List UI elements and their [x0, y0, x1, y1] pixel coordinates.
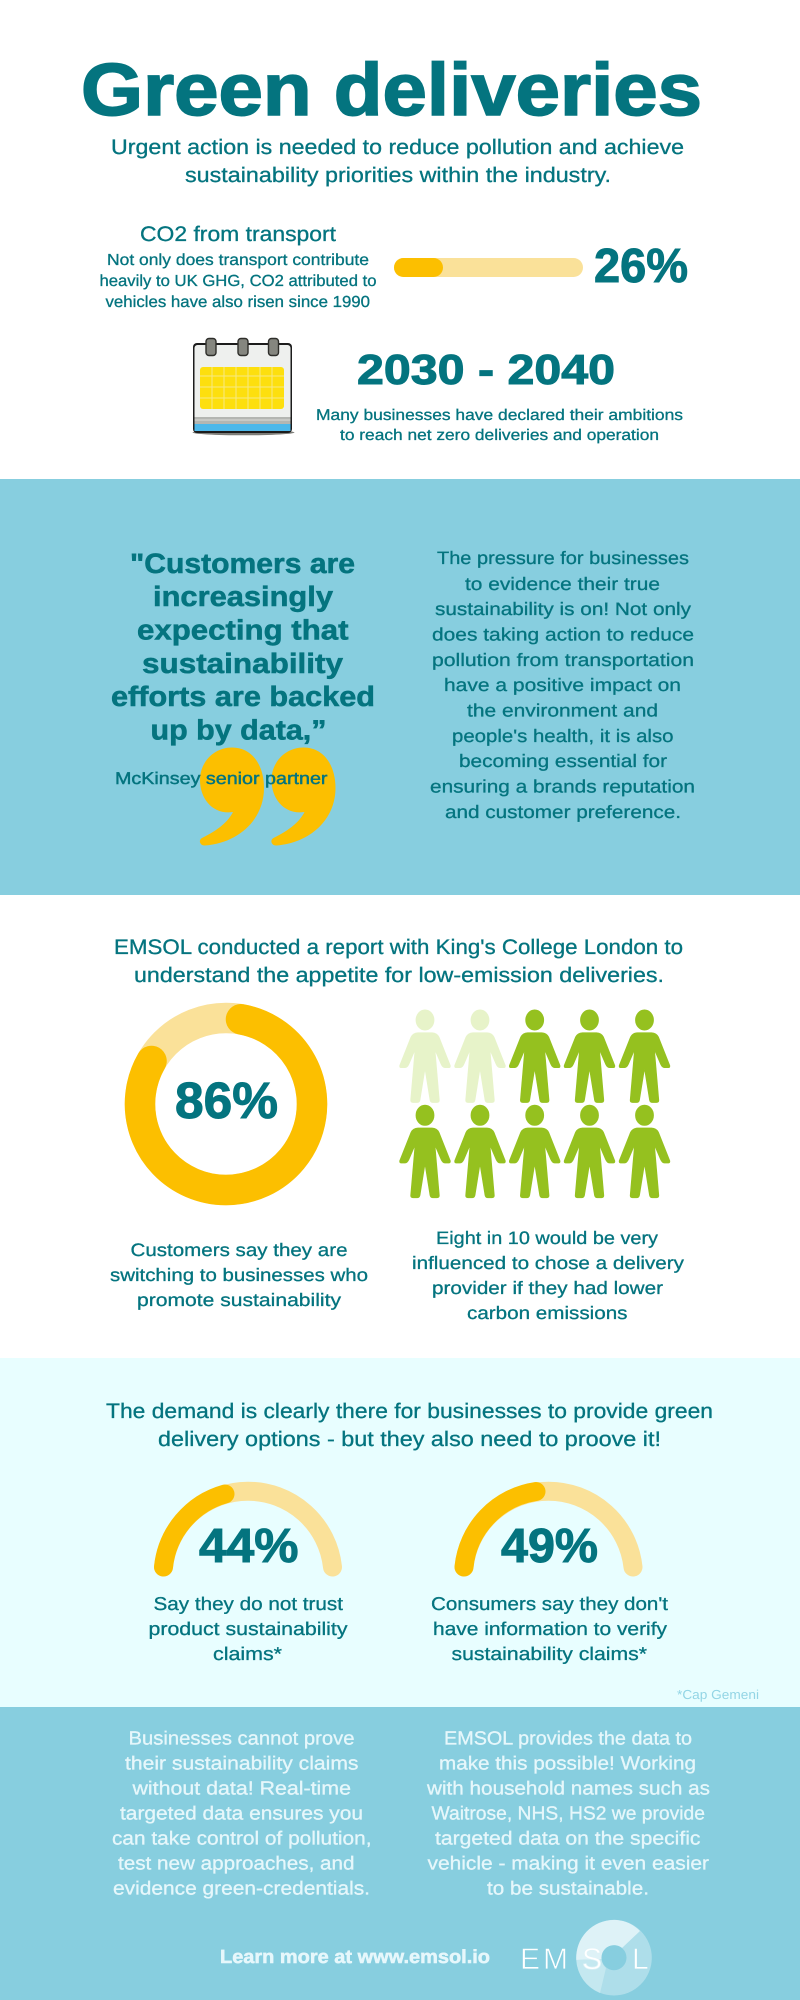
progress bar: 26%: [394, 258, 583, 277]
report heading: [114, 936, 683, 987]
pressure paragraph: the environment and: [467, 700, 658, 720]
subtitle: [111, 136, 684, 187]
gauge chart: 44%: [164, 1491, 332, 1567]
stat: 44%: 44%: [199, 1520, 298, 1573]
pull quote: efforts are backed: [111, 681, 375, 712]
stat: 2030 - 2040: 2030 - 2040: [357, 346, 615, 393]
donut chart: 86%: [140, 1018, 312, 1190]
gauge chart: 49%: [464, 1491, 633, 1567]
pull quote: expecting that: [137, 614, 348, 646]
pressure paragraph: sustainability is on! Not only: [435, 599, 691, 619]
pull quote: "Customers are: [130, 548, 355, 579]
panel: demand and proof: [0, 1358, 800, 1708]
donut caption: switching to businesses who: [110, 1265, 368, 1285]
right paragraph: targeted data on the specific: [435, 1828, 700, 1850]
stat: 86%: 86%: [175, 1072, 278, 1129]
demand heading: The demand is clearly there for businesses to provide green: [106, 1400, 713, 1423]
pull quote: increasingly: [153, 581, 333, 612]
icon: closing quote marks: [200, 748, 336, 846]
panel: EMSOL report: [0, 895, 800, 1358]
pressure paragraph: people's health, it is also: [452, 726, 674, 746]
gauge caption: information: have information to verify: [433, 1618, 668, 1639]
gauge caption: trust: Say they do not trust: [154, 1593, 343, 1614]
pressure paragraph: becoming essential for: [459, 751, 667, 771]
logo: EMSOL: EM SOL: [520, 1943, 649, 1976]
icon: calendar: [192, 338, 294, 435]
pressure paragraph: to evidence their true: [465, 574, 660, 594]
stat: 49%: 49%: [501, 1520, 598, 1573]
pull quote: [111, 548, 375, 746]
CO2 from transport text block: CO2 from transport: [140, 223, 336, 246]
CO2 from transport text block: vehicles have also risen since 1990: [106, 294, 370, 311]
gauge caption: information: sustainability claims*: [452, 1643, 647, 1664]
pressure paragraph: have a positive impact on: [444, 675, 681, 695]
pressure paragraph: does taking action to reduce: [432, 624, 694, 644]
CO2 from transport text block: Not only does transport contribute: [107, 252, 369, 269]
donut caption: [110, 1240, 368, 1310]
net zero ambitions text: Many businesses have declared their ambitions: [316, 407, 683, 424]
pictogram caption: carbon emissions: [467, 1303, 628, 1323]
pictogram caption: Eight in 10 would be very: [436, 1228, 658, 1248]
subtitle: Urgent action is needed to reduce pollution and achieve: [111, 136, 684, 159]
subtitle: sustainability priorities within the industry.: [185, 164, 611, 187]
donut caption: promote sustainability: [137, 1290, 341, 1310]
stat: 26%: 26%: [594, 240, 688, 293]
panel: call to action: [0, 1707, 800, 2000]
panel: intro header: [0, 0, 800, 480]
CO2 from transport text block: [100, 223, 377, 311]
demand heading: [106, 1400, 713, 1451]
left paragraph: their sustainability claims: [125, 1754, 358, 1774]
pictogram caption: influenced to chose a delivery: [412, 1253, 684, 1273]
right paragraph: vehicle - making it even easier: [428, 1854, 710, 1874]
pull quote: up by data,”: [150, 714, 326, 746]
left paragraph: can take control of pollution,: [112, 1828, 372, 1850]
gauge caption: information: [431, 1593, 668, 1664]
donut caption: Customers say they are: [130, 1240, 348, 1260]
report heading: EMSOL conducted a report with King's College London to: [114, 936, 683, 959]
CO2 from transport text block: heavily to UK GHG, CO2 attributed to: [100, 273, 377, 290]
pictogram: eight in ten people: [400, 1010, 670, 1198]
net zero ambitions text: to reach net zero deliveries and operation: [340, 427, 659, 444]
call to action link text: Learn more at www.emsol.io: [220, 1947, 490, 1968]
right paragraph: [426, 1728, 710, 1900]
pull quote: sustainability: [142, 648, 343, 679]
left paragraph: [112, 1728, 372, 1900]
gauge caption: information: Consumers say they don't: [431, 1593, 668, 1614]
right paragraph: Waitrose, NHS, HS2 we provide: [432, 1804, 705, 1824]
pressure paragraph: [430, 548, 695, 822]
gauge caption: trust: product sustainability: [148, 1618, 348, 1639]
pictogram caption: provider if they had lower: [432, 1278, 663, 1298]
left paragraph: Businesses cannot prove: [128, 1728, 354, 1750]
left paragraph: test new approaches, and: [118, 1854, 354, 1874]
left paragraph: targeted data ensures you: [120, 1804, 363, 1824]
gauge caption: trust: [148, 1593, 348, 1664]
right paragraph: with household names such as: [426, 1778, 710, 1800]
report heading: understand the appetite for low-emission deliveries.: [134, 964, 664, 987]
pressure paragraph: and customer preference.: [445, 802, 681, 822]
quote attribution: McKinsey senior partner: [115, 769, 328, 788]
left paragraph: evidence green-credentials.: [113, 1878, 370, 1900]
pressure paragraph: The pressure for businesses: [437, 548, 689, 568]
title: Green deliveries: [81, 48, 702, 131]
right paragraph: to be sustainable.: [487, 1878, 649, 1900]
left paragraph: without data! Real-time: [131, 1778, 351, 1800]
gauge caption: trust: claims*: [213, 1643, 282, 1664]
source note: *Cap Gemeni: [677, 1687, 759, 1702]
right paragraph: EMSOL provides the data to: [444, 1728, 692, 1750]
right paragraph: make this possible! Working: [439, 1754, 696, 1774]
logo: EMSOL: [520, 1920, 652, 1995]
pictogram caption: [412, 1228, 684, 1323]
pressure paragraph: ensuring a brands reputation: [430, 776, 695, 796]
demand heading: delivery options - but they also need to proove it!: [158, 1428, 661, 1451]
net zero ambitions text: [316, 407, 683, 444]
panel: quote and pressure: [0, 479, 800, 895]
pressure paragraph: pollution from transportation: [432, 650, 694, 670]
